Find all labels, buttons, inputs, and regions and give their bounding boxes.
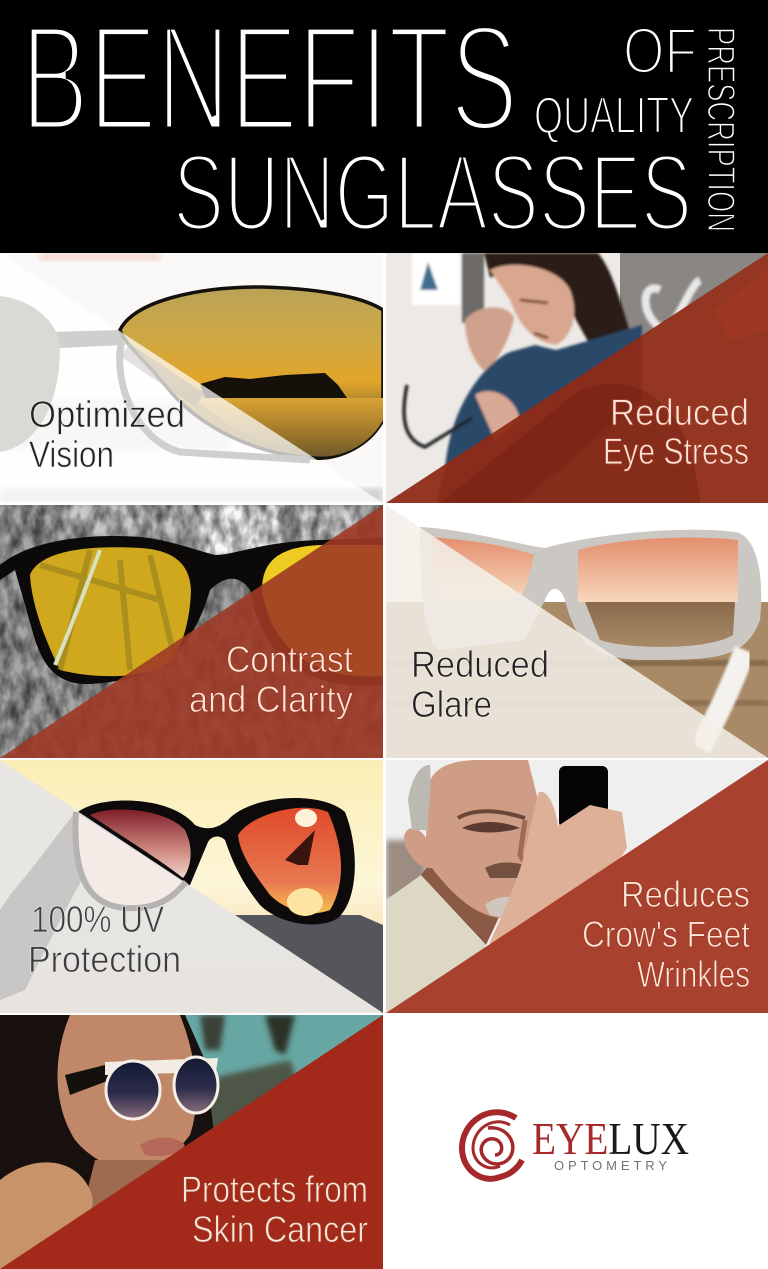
translucent triangle xyxy=(386,505,768,758)
label: Optimized Vision: Vision xyxy=(29,434,114,475)
panel: reduced eye stress xyxy=(386,253,768,503)
translucent triangle xyxy=(0,296,382,503)
wordmark: EYELUX xyxy=(532,1113,689,1164)
label: Contrast and Clarity xyxy=(189,639,354,720)
icon: white-framed sunglasses xyxy=(420,527,761,748)
icon: sunglasses lens with sunset xyxy=(0,287,383,460)
photo: background shelves xyxy=(620,253,768,336)
photo: woman with headache xyxy=(404,253,700,503)
header: title xyxy=(0,0,768,254)
label: Contrast and Clarity: Contrast xyxy=(226,639,354,680)
red triangle xyxy=(386,760,768,1013)
tagline: OPTOMETRY xyxy=(554,1158,667,1173)
photo: woman with sunglasses xyxy=(0,1015,305,1269)
label: 100% UV Protection: Protection xyxy=(28,939,181,980)
label: Reduced Glare xyxy=(412,650,547,718)
red triangle xyxy=(0,505,383,758)
translucent triangle xyxy=(0,760,383,1013)
label: Reduces Crow's Feet Wrinkles: Reduces xyxy=(621,874,750,915)
icon: black sunglasses with red lens xyxy=(78,798,355,924)
label: Protects from Skin Cancer: Skin Cancer xyxy=(192,1209,368,1250)
heading word: OF: OF xyxy=(623,14,697,87)
ghost frame under overlay xyxy=(76,812,183,906)
label: Protects from Skin Cancer xyxy=(183,1174,368,1242)
label: Optimized Vision xyxy=(29,400,183,468)
label: Reduced Glare: Glare xyxy=(411,684,492,725)
label: Reduced Glare: Reduced xyxy=(411,644,549,685)
photo: tree background xyxy=(0,505,383,758)
panel: reduces crow's feet wrinkles xyxy=(386,760,768,1013)
panel: contrast and clarity xyxy=(0,505,383,758)
icon: black sunglasses with yellow lens xyxy=(0,536,383,686)
icon: red swirl xyxy=(462,1112,522,1179)
label: Reduced Eye Stress: Reduced xyxy=(610,392,749,433)
label: Reduced Eye Stress xyxy=(603,392,749,472)
label: Contrast and Clarity: and Clarity xyxy=(189,679,353,720)
heading word: QUALITY: QUALITY xyxy=(534,87,694,145)
label: Protects from Skin Cancer: Protects from xyxy=(181,1169,368,1210)
photo: stone ledge xyxy=(235,915,383,1013)
red triangle xyxy=(386,253,768,503)
panel: reduced glare xyxy=(386,505,768,758)
label: Reduces Crow's Feet Wrinkles xyxy=(584,880,750,987)
red triangle xyxy=(0,1015,383,1269)
photo: man squinting at phone xyxy=(386,760,627,1013)
label: 100% UV Protection xyxy=(30,906,178,972)
panel: protects from skin cancer xyxy=(0,1015,383,1269)
label: 100% UV Protection: 100% UV xyxy=(31,899,164,940)
logo: Eyelux Optometry xyxy=(462,1112,689,1179)
panel: optimized vision xyxy=(0,253,383,503)
panel: 100% UV protection xyxy=(0,760,383,1013)
label: Optimized Vision: Optimized xyxy=(29,394,185,435)
heading word: PRESCRIPTION: PRESCRIPTION xyxy=(699,27,742,232)
